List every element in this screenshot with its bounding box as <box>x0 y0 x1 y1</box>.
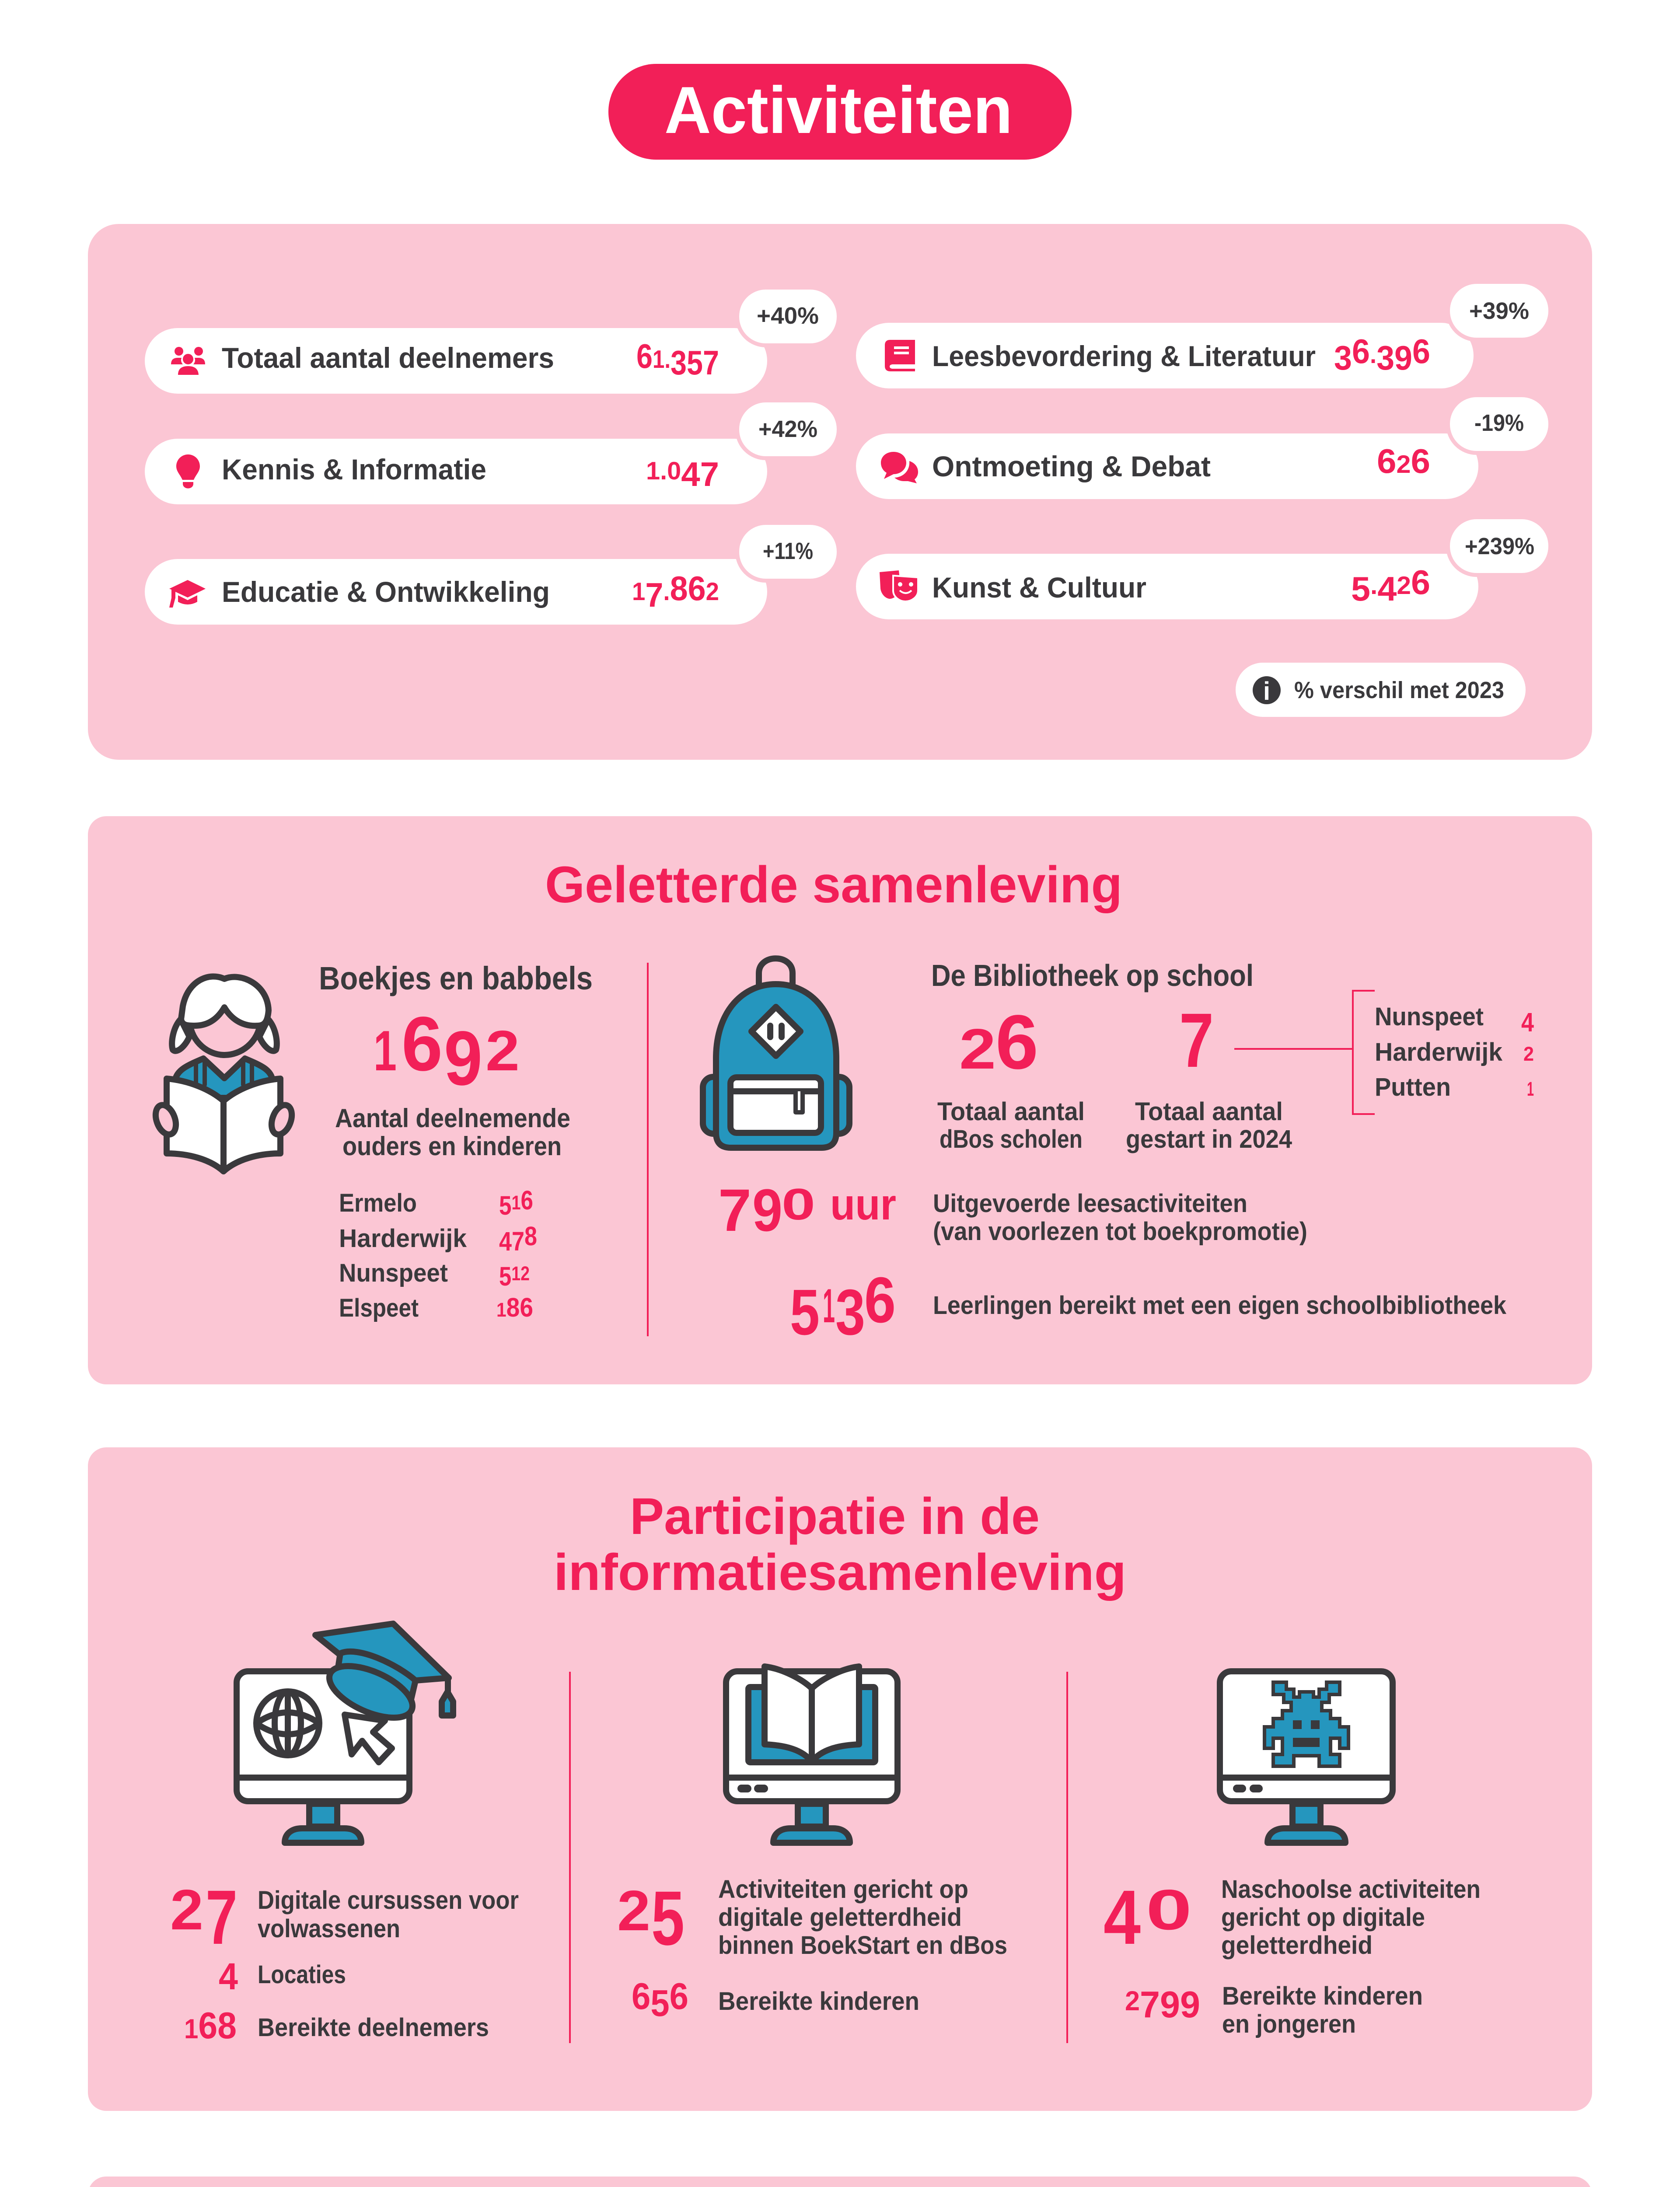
heading <box>554 1488 1126 1601</box>
badge: +42%: +42% <box>758 416 817 442</box>
row: Ontmoeting & Debat: 626 <box>1377 442 1430 480</box>
stats: Naschoolse activiteiten: 0 <box>1146 1878 1192 1942</box>
bracket: new locations <box>1234 991 1375 1114</box>
stat: 5136: Leerlingen bereikt met een eigen schoolbibliotheek <box>933 1291 1507 1320</box>
icon: girl reading <box>152 976 296 1171</box>
badge: +239% <box>1450 519 1548 573</box>
title: Activiteiten <box>608 64 1072 160</box>
stats: Activiteiten BoekStart en dBos: digitale geletterdheid <box>718 1903 962 1932</box>
badge: +11% <box>739 525 837 579</box>
stats: Digitale cursussen: Digitale cursussen voor <box>258 1886 519 1914</box>
stats: Naschoolse activiteiten <box>1104 1875 1481 2038</box>
block: De Bibliotheek op school: De Bibliotheek op school <box>931 958 1254 992</box>
block: De Bibliotheek op school: dBos scholen <box>940 1125 1083 1153</box>
badge: -19%: -19% <box>1474 410 1524 436</box>
block: Boekjes en babbels: Elspeet <box>339 1294 419 1322</box>
block: Boekjes en babbels: 478 <box>499 1221 537 1256</box>
stats: Digitale cursussen: volwassenen <box>258 1914 400 1943</box>
heading: informatiesamenleving <box>554 1544 1126 1601</box>
block: De Bibliotheek op school <box>931 958 1534 1153</box>
stat: 5136: 1 <box>823 1279 835 1333</box>
row: Educatie & Ontwikkeling: 17.862 <box>632 569 719 614</box>
stats: Digitale cursussen: 4 <box>219 1956 238 1998</box>
block: De Bibliotheek op school: 2 <box>959 1017 996 1081</box>
stats: Naschoolse activiteiten: en jongeren <box>1222 2010 1356 2038</box>
block: Boekjes en babbels: 186 <box>496 1293 533 1322</box>
icon: monitor with book <box>726 1666 898 1843</box>
stats: Naschoolse activiteiten: Naschoolse activiteiten <box>1221 1875 1481 1904</box>
legend: % verschil met 2023 <box>1236 663 1526 717</box>
title: Activiteiten: Activiteiten <box>664 73 1013 147</box>
badge: +42% <box>739 402 837 456</box>
icon: people <box>171 347 205 375</box>
row: Kennis & Informatie <box>145 439 767 504</box>
stats: Digitale cursussen <box>170 1875 519 2047</box>
stat: 5136 <box>790 1264 1507 1349</box>
heading: Participatie in de <box>630 1488 1040 1545</box>
block: Boekjes en babbels: Boekjes en babbels <box>319 960 593 996</box>
badge: +40% <box>739 290 837 343</box>
stat: 5136: 5 <box>790 1276 820 1349</box>
stats: Digitale cursussen: 2 <box>170 1878 203 1942</box>
block: Boekjes en babbels: ouders en kinderen <box>342 1132 562 1161</box>
stats: Activiteiten BoekStart en dBos: Activiteiten gericht op <box>718 1875 968 1904</box>
stats: Naschoolse activiteiten: 2799 <box>1125 1984 1200 2026</box>
stats: Naschoolse activiteiten: geletterdheid <box>1221 1931 1373 1960</box>
icon: graduation cap <box>169 580 206 608</box>
stats: Naschoolse activiteiten: Bereikte kinderen <box>1222 1982 1423 2010</box>
row: Educatie & Ontwikkeling: Educatie & Ontwikkeling <box>222 576 550 608</box>
stats: Activiteiten BoekStart en dBos: binnen BoekStart en dBos <box>718 1931 1007 1960</box>
block: De Bibliotheek op school: 4 <box>1521 1007 1534 1037</box>
row: Leesbevordering & Literatuur: Leesbevordering & Literatuur <box>932 340 1316 372</box>
block: Boekjes en babbels: 512 <box>499 1261 530 1291</box>
block: De Bibliotheek op school: 1 <box>1527 1078 1534 1100</box>
icon: monitor with space invader <box>1220 1671 1393 1843</box>
stat: 5136: 3 <box>835 1276 865 1349</box>
stat: 790 uur: 0 <box>782 1180 815 1229</box>
icon: monitor with globe and graduation cap <box>237 1624 453 1843</box>
stats: Naschoolse activiteiten: 4 <box>1104 1875 1141 1960</box>
block: Boekjes en babbels: Ermelo <box>339 1189 417 1217</box>
stats: Digitale cursussen: 7 <box>206 1875 238 1960</box>
row: Kunst & Cultuur: Kunst & Cultuur <box>932 571 1146 604</box>
stats: Activiteiten BoekStart en dBos: 656 <box>632 1976 688 2024</box>
block: De Bibliotheek op school: Harderwijk <box>1375 1038 1503 1066</box>
block: Boekjes en babbels: 2 <box>485 1019 520 1083</box>
block: De Bibliotheek op school: 6 <box>995 999 1038 1085</box>
row: Ontmoeting & Debat: Ontmoeting & Debat <box>932 450 1211 482</box>
row: Ontmoeting & Debat <box>856 433 1478 499</box>
panel: Participatie in de informatiesamenleving <box>88 1447 1592 2111</box>
stats: Activiteiten BoekStart en dBos <box>617 1875 1007 2024</box>
stats: Digitale cursussen: Bereikte deelnemers <box>258 2013 489 2042</box>
icon: backpack <box>703 958 849 1148</box>
badge: +39%: +39% <box>1469 298 1529 324</box>
stat: 790 uur <box>718 1177 1307 1246</box>
icon: book <box>885 340 915 371</box>
row: Kunst & Cultuur: 5.426 <box>1351 563 1430 608</box>
row: Leesbevordering & Literatuur: 36.396 <box>1334 332 1430 377</box>
panel: totals <box>88 224 1592 760</box>
badge: +39% <box>1450 284 1548 338</box>
icon: light bulb <box>176 454 200 488</box>
stats: Activiteiten BoekStart en dBos: Bereikte kinderen <box>718 1987 919 2016</box>
badge: +239%: +239% <box>1465 533 1534 559</box>
block: Boekjes en babbels: 6 <box>402 1001 443 1087</box>
stats: Naschoolse activiteiten: gericht op digitale <box>1221 1903 1425 1932</box>
badge: -19% <box>1450 397 1548 451</box>
icon: speech bubbles <box>881 452 918 483</box>
block: De Bibliotheek op school: Totaal aantal <box>937 1097 1085 1126</box>
block: Boekjes en babbels: 516 <box>499 1185 533 1220</box>
block: Boekjes en babbels: Harderwijk <box>339 1224 467 1253</box>
row: Totaal aantal deelnemers: Totaal aantal deelnemers <box>222 342 554 374</box>
row: Kennis & Informatie: 1.047 <box>646 455 719 493</box>
stat: 790 uur: 9 <box>752 1177 782 1244</box>
panel: Leven lang leren <box>88 2177 1592 2187</box>
block: De Bibliotheek op school: gestart in 2024 <box>1126 1125 1292 1153</box>
stats: Digitale cursussen: Locaties <box>258 1960 346 1989</box>
stats: Activiteiten BoekStart en dBos: 5 <box>651 1876 685 1961</box>
stat: 790 uur: uur <box>830 1180 896 1229</box>
legend: % verschil met 2023: % verschil met 2023 <box>1294 677 1504 703</box>
row: Kunst & Cultuur <box>856 554 1478 619</box>
stats: Activiteiten BoekStart en dBos: 2 <box>617 1879 650 1942</box>
block: Boekjes en babbels: Aantal deelnemende <box>335 1104 570 1133</box>
heading: Geletterde samenleving <box>545 856 1122 914</box>
row: Kennis & Informatie: Kennis & Informatie <box>222 453 486 486</box>
block: De Bibliotheek op school: Nunspeet <box>1375 1003 1484 1031</box>
legend: % verschil met 2023: i <box>1263 677 1270 706</box>
row: Educatie & Ontwikkeling <box>145 559 767 625</box>
icon: theatre masks <box>880 570 918 601</box>
row: Leesbevordering & Literatuur <box>856 323 1474 388</box>
block: Boekjes en babbels <box>319 960 593 1322</box>
row: Totaal aantal deelnemers: 61.357 <box>636 337 719 382</box>
block: Boekjes en babbels: 9 <box>444 1016 482 1101</box>
stats: Digitale cursussen: 168 <box>184 2005 237 2047</box>
stat: 790 uur: 7 <box>718 1177 751 1244</box>
block: De Bibliotheek op school: 7 <box>1179 998 1214 1083</box>
block: Boekjes en babbels: 1 <box>374 1019 397 1083</box>
block: Boekjes en babbels: Nunspeet <box>339 1259 448 1287</box>
stat: 5136: 6 <box>864 1264 896 1336</box>
panel: Geletterde samenleving <box>88 816 1592 1384</box>
row: Totaal aantal deelnemers <box>145 328 767 394</box>
badge: +40%: +40% <box>757 303 819 329</box>
block: De Bibliotheek op school: Putten <box>1375 1073 1451 1101</box>
block: De Bibliotheek op school: Totaal aantal <box>1135 1097 1283 1126</box>
stat: 790 uur: Uitgevoerde leesactiviteiten <box>933 1189 1247 1218</box>
block: De Bibliotheek op school: 2 <box>1523 1043 1534 1065</box>
stat: 790 uur: (van voorlezen tot boekpromotie) <box>933 1217 1307 1246</box>
badge: +11%: +11% <box>763 538 813 564</box>
